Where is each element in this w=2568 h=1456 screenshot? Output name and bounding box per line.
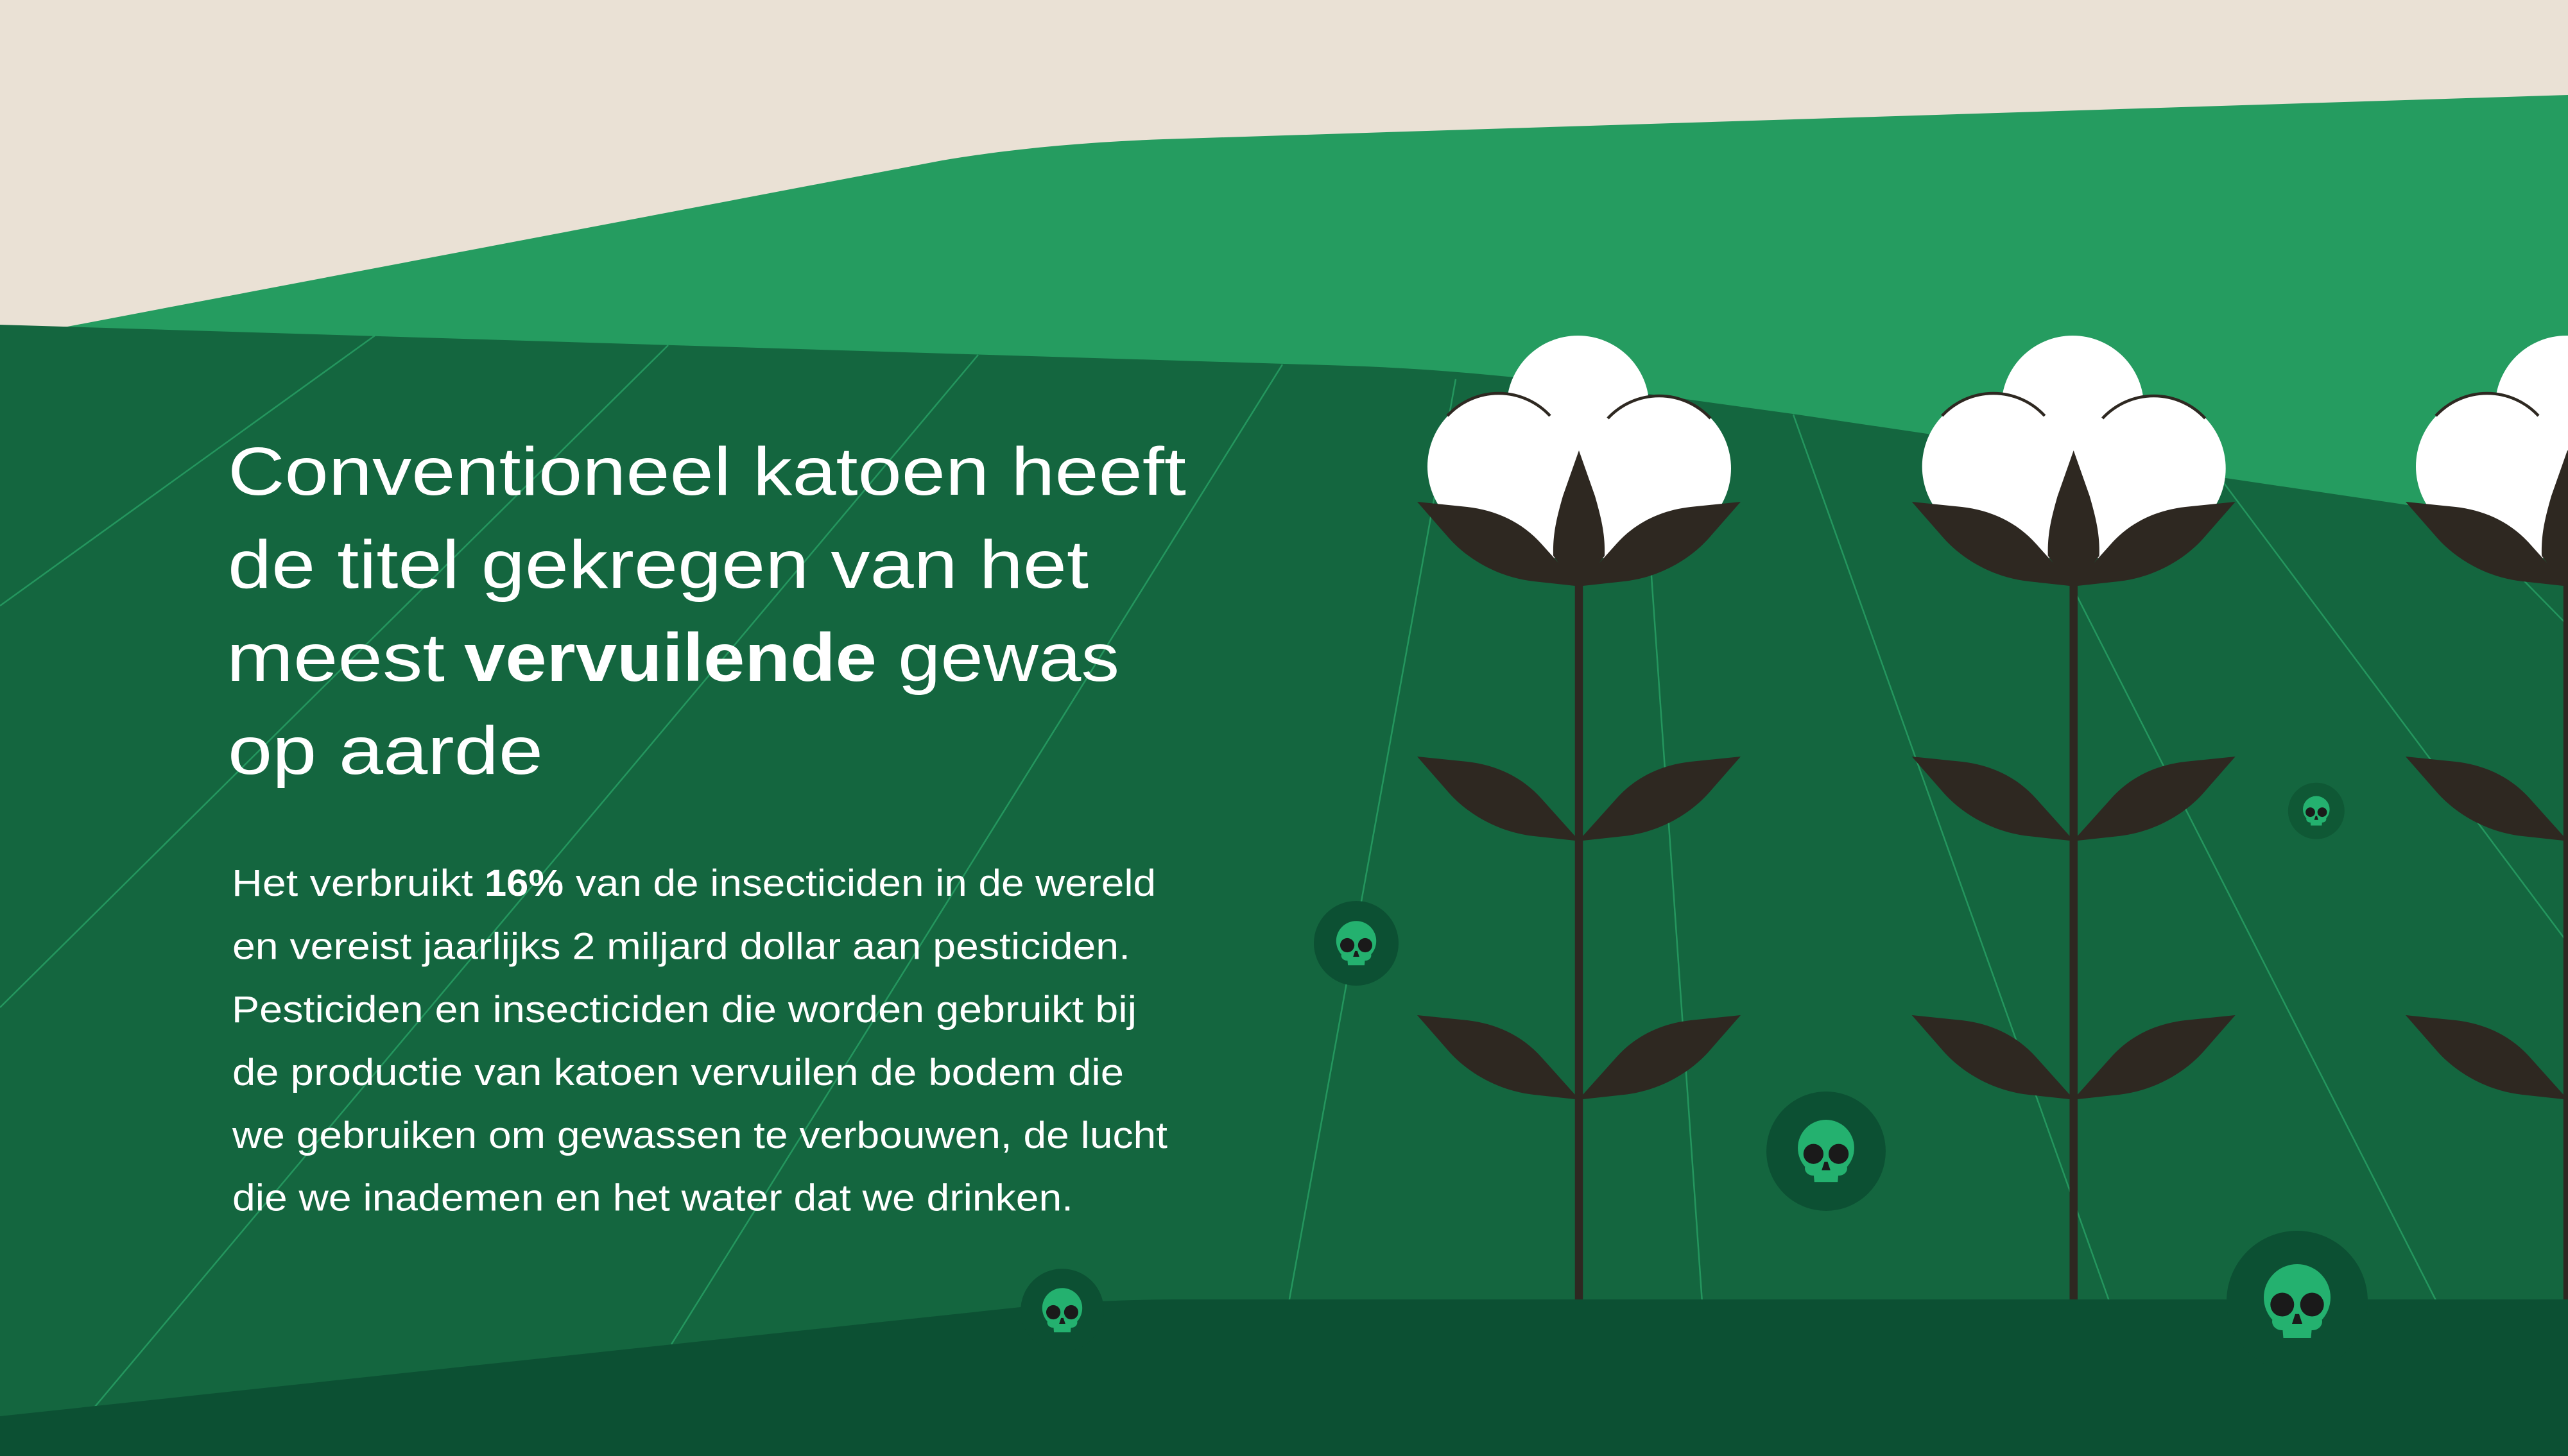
heading: Conventioneel katoen heeft: [228, 434, 1186, 510]
body paragraph: [232, 862, 1168, 1219]
skull marker: upper left: [1314, 901, 1399, 986]
heading: [227, 434, 1186, 789]
body paragraph: Pesticiden en insecticiden die worden gebruikt bij: [232, 989, 1137, 1031]
body paragraph: die we inademen en het water dat we drinken.: [232, 1177, 1073, 1219]
cotton plant 2: [1912, 336, 2236, 1299]
body paragraph: Het verbruikt: [232, 862, 473, 904]
field furrow lines: [0, 336, 2568, 1407]
body paragraph: 16%: [485, 862, 564, 904]
body paragraph: de productie van katoen vervuilen de bodem die: [232, 1052, 1124, 1093]
heading: gewas: [898, 620, 1119, 696]
body paragraph: en vereist jaarlijks 2 miljard dollar aan pesticiden.: [232, 925, 1130, 968]
body paragraph: van de insecticiden in de wereld: [576, 862, 1156, 904]
middle field: [0, 325, 2568, 1456]
cotton plant 3: [2406, 336, 2568, 1299]
skull marker: on ground right: [2227, 1231, 2368, 1372]
heading: de titel gekregen van het: [228, 527, 1089, 603]
heading: vervuilende: [464, 620, 877, 696]
skull marker: on ground left: [1021, 1269, 1104, 1352]
foreground ground: [0, 1299, 2568, 1456]
cotton plant 1: [1417, 336, 1741, 1299]
far hill: [0, 95, 2568, 578]
skull marker: small right: [2288, 783, 2345, 839]
body paragraph: we gebruiken om gewassen te verbouwen, de lucht: [232, 1115, 1168, 1156]
heading: meest: [227, 620, 445, 696]
skull marker: middle: [1766, 1092, 1886, 1211]
heading: op aarde: [228, 713, 543, 789]
